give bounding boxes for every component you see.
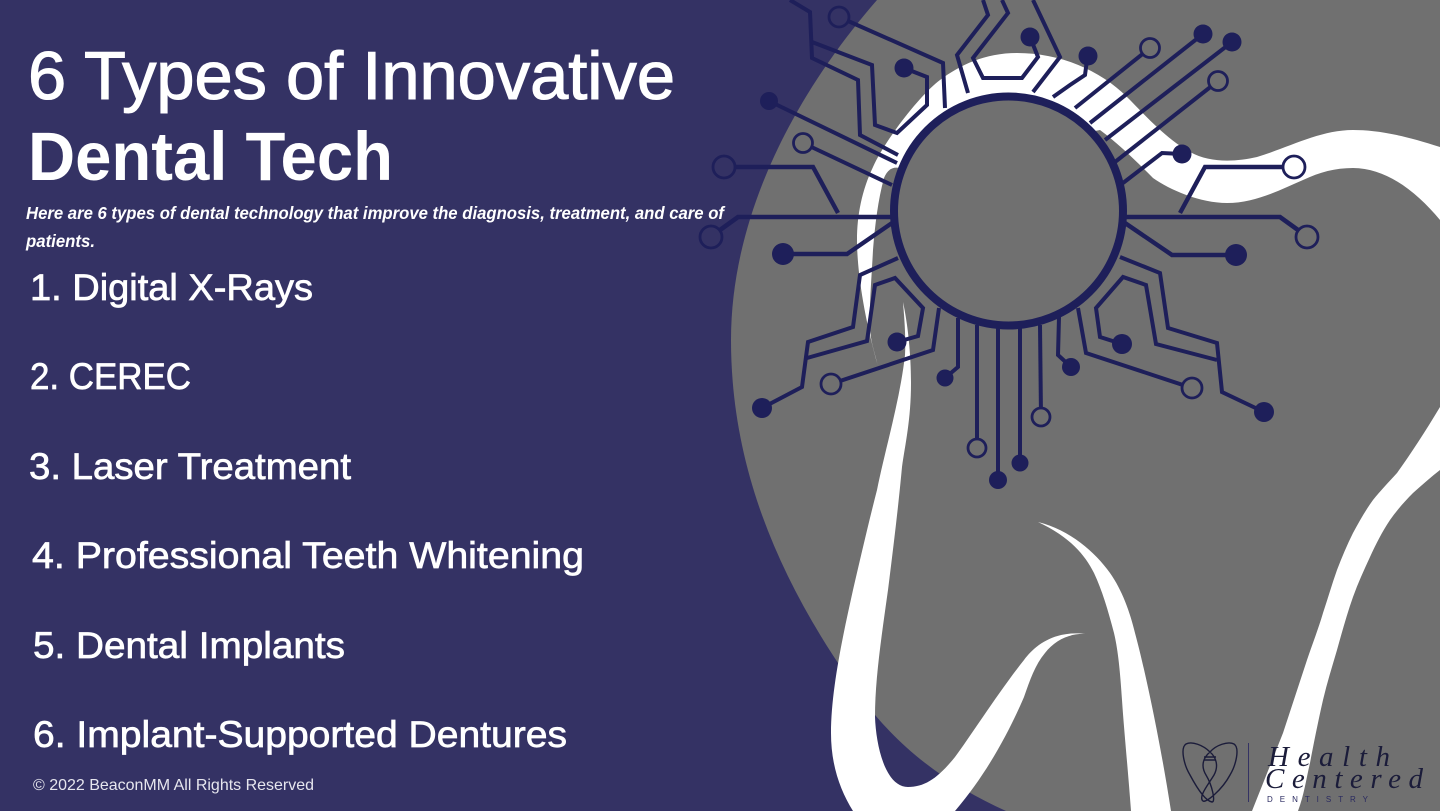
upper-right traces (1075, 24, 1242, 183)
intro text: Here are 6 types of dental technology that improve the diagnosis, treatment, and care of (26, 203, 726, 223)
logo script name (1265, 741, 1424, 795)
gray background circle (731, 0, 1440, 811)
title line 2: Dental Tech (28, 118, 393, 195)
item 1: 1. Digital X-Rays (30, 267, 313, 308)
lower-left traces (752, 258, 939, 418)
upper-left traces (760, 0, 945, 185)
tooth right root (1252, 407, 1440, 811)
logo divider (1248, 743, 1249, 802)
title line 1: 6 Types of Innovative (28, 38, 675, 114)
intro text (25, 203, 726, 251)
tooth outline (831, 53, 1440, 811)
logo script name: Health (1267, 741, 1390, 773)
logo: Health Centered Dentistry (1183, 741, 1424, 804)
circuit traces (700, 0, 1318, 489)
item 4: 4. Professional Teeth Whitening (32, 535, 584, 576)
title (28, 38, 675, 195)
item 5: 5. Dental Implants (33, 625, 345, 666)
item 3: 3. Laser Treatment (29, 446, 352, 487)
left traces (700, 156, 892, 265)
item 6: 6. Implant-Supported Dentures (33, 714, 567, 755)
copyright: © 2022 BeaconMM All Rights Reserved (33, 777, 314, 794)
right traces (1125, 156, 1318, 266)
tooth crown band (857, 53, 1440, 366)
logo tagline: DENTISTRY (1267, 795, 1369, 804)
central hub circle (894, 96, 1123, 326)
tooth left root (831, 302, 1086, 811)
tooth middle root (1038, 522, 1171, 811)
lower-right traces (1078, 257, 1274, 422)
bottom traces (936, 317, 1080, 489)
list of dental technologies (29, 267, 584, 755)
logo script name: Centered (1265, 763, 1424, 795)
item 2: 2. CEREC (30, 356, 191, 397)
icon: tooth logo mark (1183, 743, 1237, 802)
top traces (957, 0, 1098, 97)
intro text: patients. (25, 231, 95, 251)
